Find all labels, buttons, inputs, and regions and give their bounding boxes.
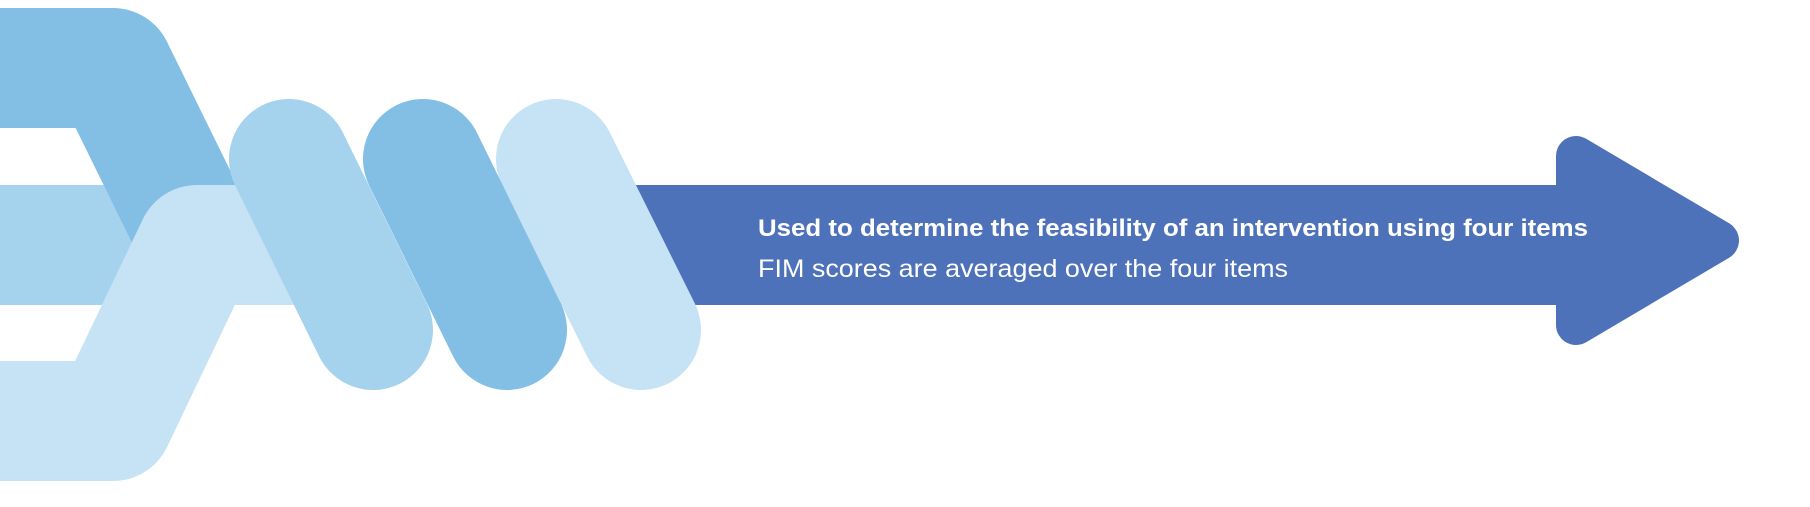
caption headline: Used to determine the feasibility of an intervention using four items	[758, 215, 1588, 242]
pill: first medium strand	[289, 159, 373, 330]
pill: second dark strand	[423, 159, 507, 330]
arrow shaft	[560, 185, 1570, 305]
caption detail: FIM scores are averaged over the four items	[758, 255, 1288, 283]
band: medium blue horizontal strand	[0, 185, 240, 305]
pill: third light strand	[556, 159, 641, 330]
arrow: dark blue shaft and head	[560, 156, 1719, 325]
band: lower light strand rising	[0, 245, 310, 421]
text block: arrow caption	[758, 215, 1588, 283]
arrow head	[1576, 156, 1719, 325]
band: upper strand descending	[0, 68, 197, 239]
